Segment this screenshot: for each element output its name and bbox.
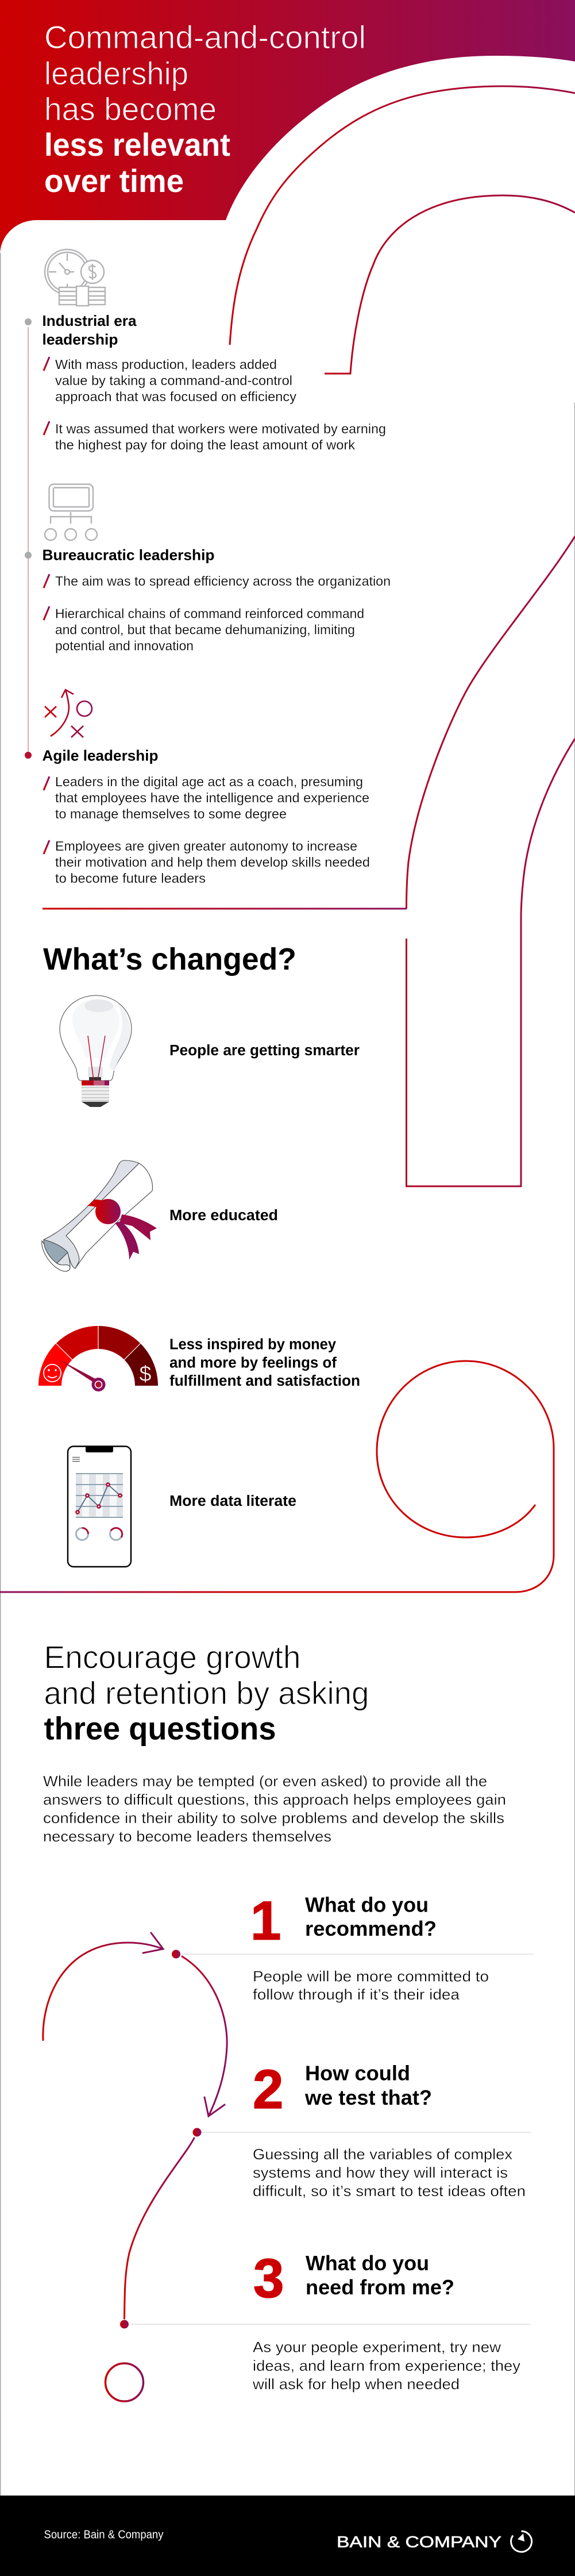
title: over time xyxy=(44,163,184,199)
intro paragraph: answers to difficult questions, this approach helps employees gain xyxy=(43,1791,506,1808)
bullet: hierarchical chains: Hierarchical chains of command reinforced command xyxy=(55,606,364,621)
question mark path arrow 2 xyxy=(182,1956,227,2116)
Bain & Company logo: BAIN & COMPANY xyxy=(337,2533,501,2551)
title: Command-and-control xyxy=(44,19,366,55)
question mark outline: bottom rule of agile section xyxy=(43,908,407,909)
bullet: hierarchical chains xyxy=(44,606,364,653)
bullet: spread efficiency: The aim was to spread efficiency across the organization xyxy=(55,574,391,589)
step 1: recommend? xyxy=(305,1917,437,1940)
step 3: need from me? xyxy=(306,2275,454,2299)
step 2: How could xyxy=(305,2061,410,2085)
bullet: mass production: value by taking a command-and-control xyxy=(55,373,292,388)
question mark outline: outer top stroke xyxy=(230,86,575,345)
bullet: leaders as coach: that employees have the intelligence and experience xyxy=(55,790,369,805)
step 1: People will be more committed to xyxy=(253,1968,489,1985)
bullet: mass production xyxy=(44,357,297,404)
step 3 xyxy=(120,2248,530,2393)
heading: Bureaucratic leadership: Bureaucratic leadership xyxy=(43,546,215,563)
heading: Industrial era leadership: Industrial era xyxy=(43,312,137,329)
icon: smartphone with chart xyxy=(68,1446,131,1567)
heading: encourage growth: and retention by asking xyxy=(44,1675,369,1711)
question mark outline: inner top stroke xyxy=(325,195,575,374)
icon: light bulb xyxy=(60,995,132,1107)
step 3: What do you xyxy=(306,2251,429,2275)
bullet: greater autonomy: to become future leaders xyxy=(55,871,206,886)
label: less inspired by money: and more by feelings of xyxy=(169,1355,337,1371)
step 3: 3 xyxy=(253,2248,284,2309)
Bain & Company logo xyxy=(337,2531,532,2552)
question mark outline: outer lower stroke xyxy=(407,536,575,909)
bullet: workers motivated: It was assumed that workers were motivated by earning xyxy=(55,421,386,436)
label: more data literate: More data literate xyxy=(169,1493,296,1509)
header gradient banner xyxy=(0,0,575,270)
heading: encourage growth xyxy=(44,1639,369,1746)
question mark outline: inner lower stroke and stem box xyxy=(407,739,575,1186)
bullet: workers motivated xyxy=(44,421,386,452)
title: less relevant xyxy=(44,126,230,163)
bullet: mass production: With mass production, leaders added xyxy=(55,357,277,372)
bullet: greater autonomy xyxy=(44,839,370,886)
heading: Agile leadership: Agile leadership xyxy=(43,747,159,764)
title xyxy=(44,19,366,199)
bullet: leaders as coach xyxy=(44,774,369,821)
step 1 xyxy=(172,1890,533,2003)
label: more educated: More educated xyxy=(169,1208,278,1224)
label: less inspired by money: Less inspired by money xyxy=(169,1337,337,1353)
bullet: leaders as coach: Leaders in the digital age act as a coach, presuming xyxy=(55,774,363,789)
timeline xyxy=(25,318,32,759)
question mark dot outline xyxy=(0,1361,554,1592)
icon: gauge: $ xyxy=(139,1362,152,1386)
bullet: hierarchical chains: and control, but that became dehumanizing, limiting xyxy=(55,622,355,637)
intro paragraph: necessary to become leaders themselves xyxy=(43,1828,331,1845)
title: leadership xyxy=(44,55,188,91)
step 1: What do you xyxy=(305,1893,429,1916)
heading: Industrial era leadership: leadership xyxy=(43,331,118,348)
bullet: mass production: approach that was focused on efficiency xyxy=(55,389,297,404)
step 2: systems and how they will interact is xyxy=(253,2164,508,2181)
icon: clock and money xyxy=(45,249,105,306)
step 2: difficult, so it’s smart to test ideas often xyxy=(253,2182,526,2200)
heading: encourage growth: three questions xyxy=(44,1710,276,1746)
question mark path stroke 3 xyxy=(124,2138,194,2319)
question mark path arrow 1 xyxy=(43,1933,163,2040)
source note: Source: Bain & Company xyxy=(44,2529,163,2542)
bullet: greater autonomy: their motivation and help them develop skills needed xyxy=(55,855,370,870)
step 2 xyxy=(193,2059,531,2200)
step 3: As your people experiment, try new xyxy=(253,2338,501,2355)
bullet: leaders as coach: to manage themselves to some degree xyxy=(55,806,287,821)
bullet: workers motivated: the highest pay for doing the least amount of work xyxy=(55,437,356,452)
icon: gauge xyxy=(38,1326,158,1391)
step 3: ideas, and learn from experience; they xyxy=(253,2357,520,2374)
intro paragraph: confidence in their ability to solve problems and develop the skills xyxy=(43,1809,504,1827)
icon: coaching play diagram xyxy=(45,690,92,737)
bullet: greater autonomy: Employees are given greater autonomy to increase xyxy=(55,839,357,853)
step 1: follow through if it’s their idea xyxy=(253,1986,460,2003)
label: people are getting smarter: People are getting smarter xyxy=(169,1043,360,1059)
intro paragraph xyxy=(43,1773,506,1845)
icon: diploma scroll xyxy=(42,1160,157,1271)
step 2: 2 xyxy=(253,2059,283,2120)
step 2: we test that? xyxy=(304,2086,432,2109)
intro paragraph: While leaders may be tempted (or even asked) to provide all the xyxy=(43,1773,487,1790)
label: less inspired by money: fulfillment and satisfaction xyxy=(169,1373,360,1389)
question mark path dot outline xyxy=(106,2363,144,2401)
icon: org chart xyxy=(45,484,97,540)
footer bar xyxy=(0,2496,575,2576)
step 1: 1 xyxy=(250,1890,281,1952)
label: less inspired by money xyxy=(169,1337,360,1389)
step 2: Guessing all the variables of complex xyxy=(253,2146,512,2163)
heading: encourage growth: Encourage growth xyxy=(44,1639,301,1675)
heading: Industrial era leadership xyxy=(43,312,137,348)
step 3: will ask for help when needed xyxy=(252,2375,460,2393)
title: has become xyxy=(44,91,217,127)
heading: What's changed: What’s changed? xyxy=(43,942,296,976)
bullet: hierarchical chains: potential and innovation xyxy=(55,638,194,653)
